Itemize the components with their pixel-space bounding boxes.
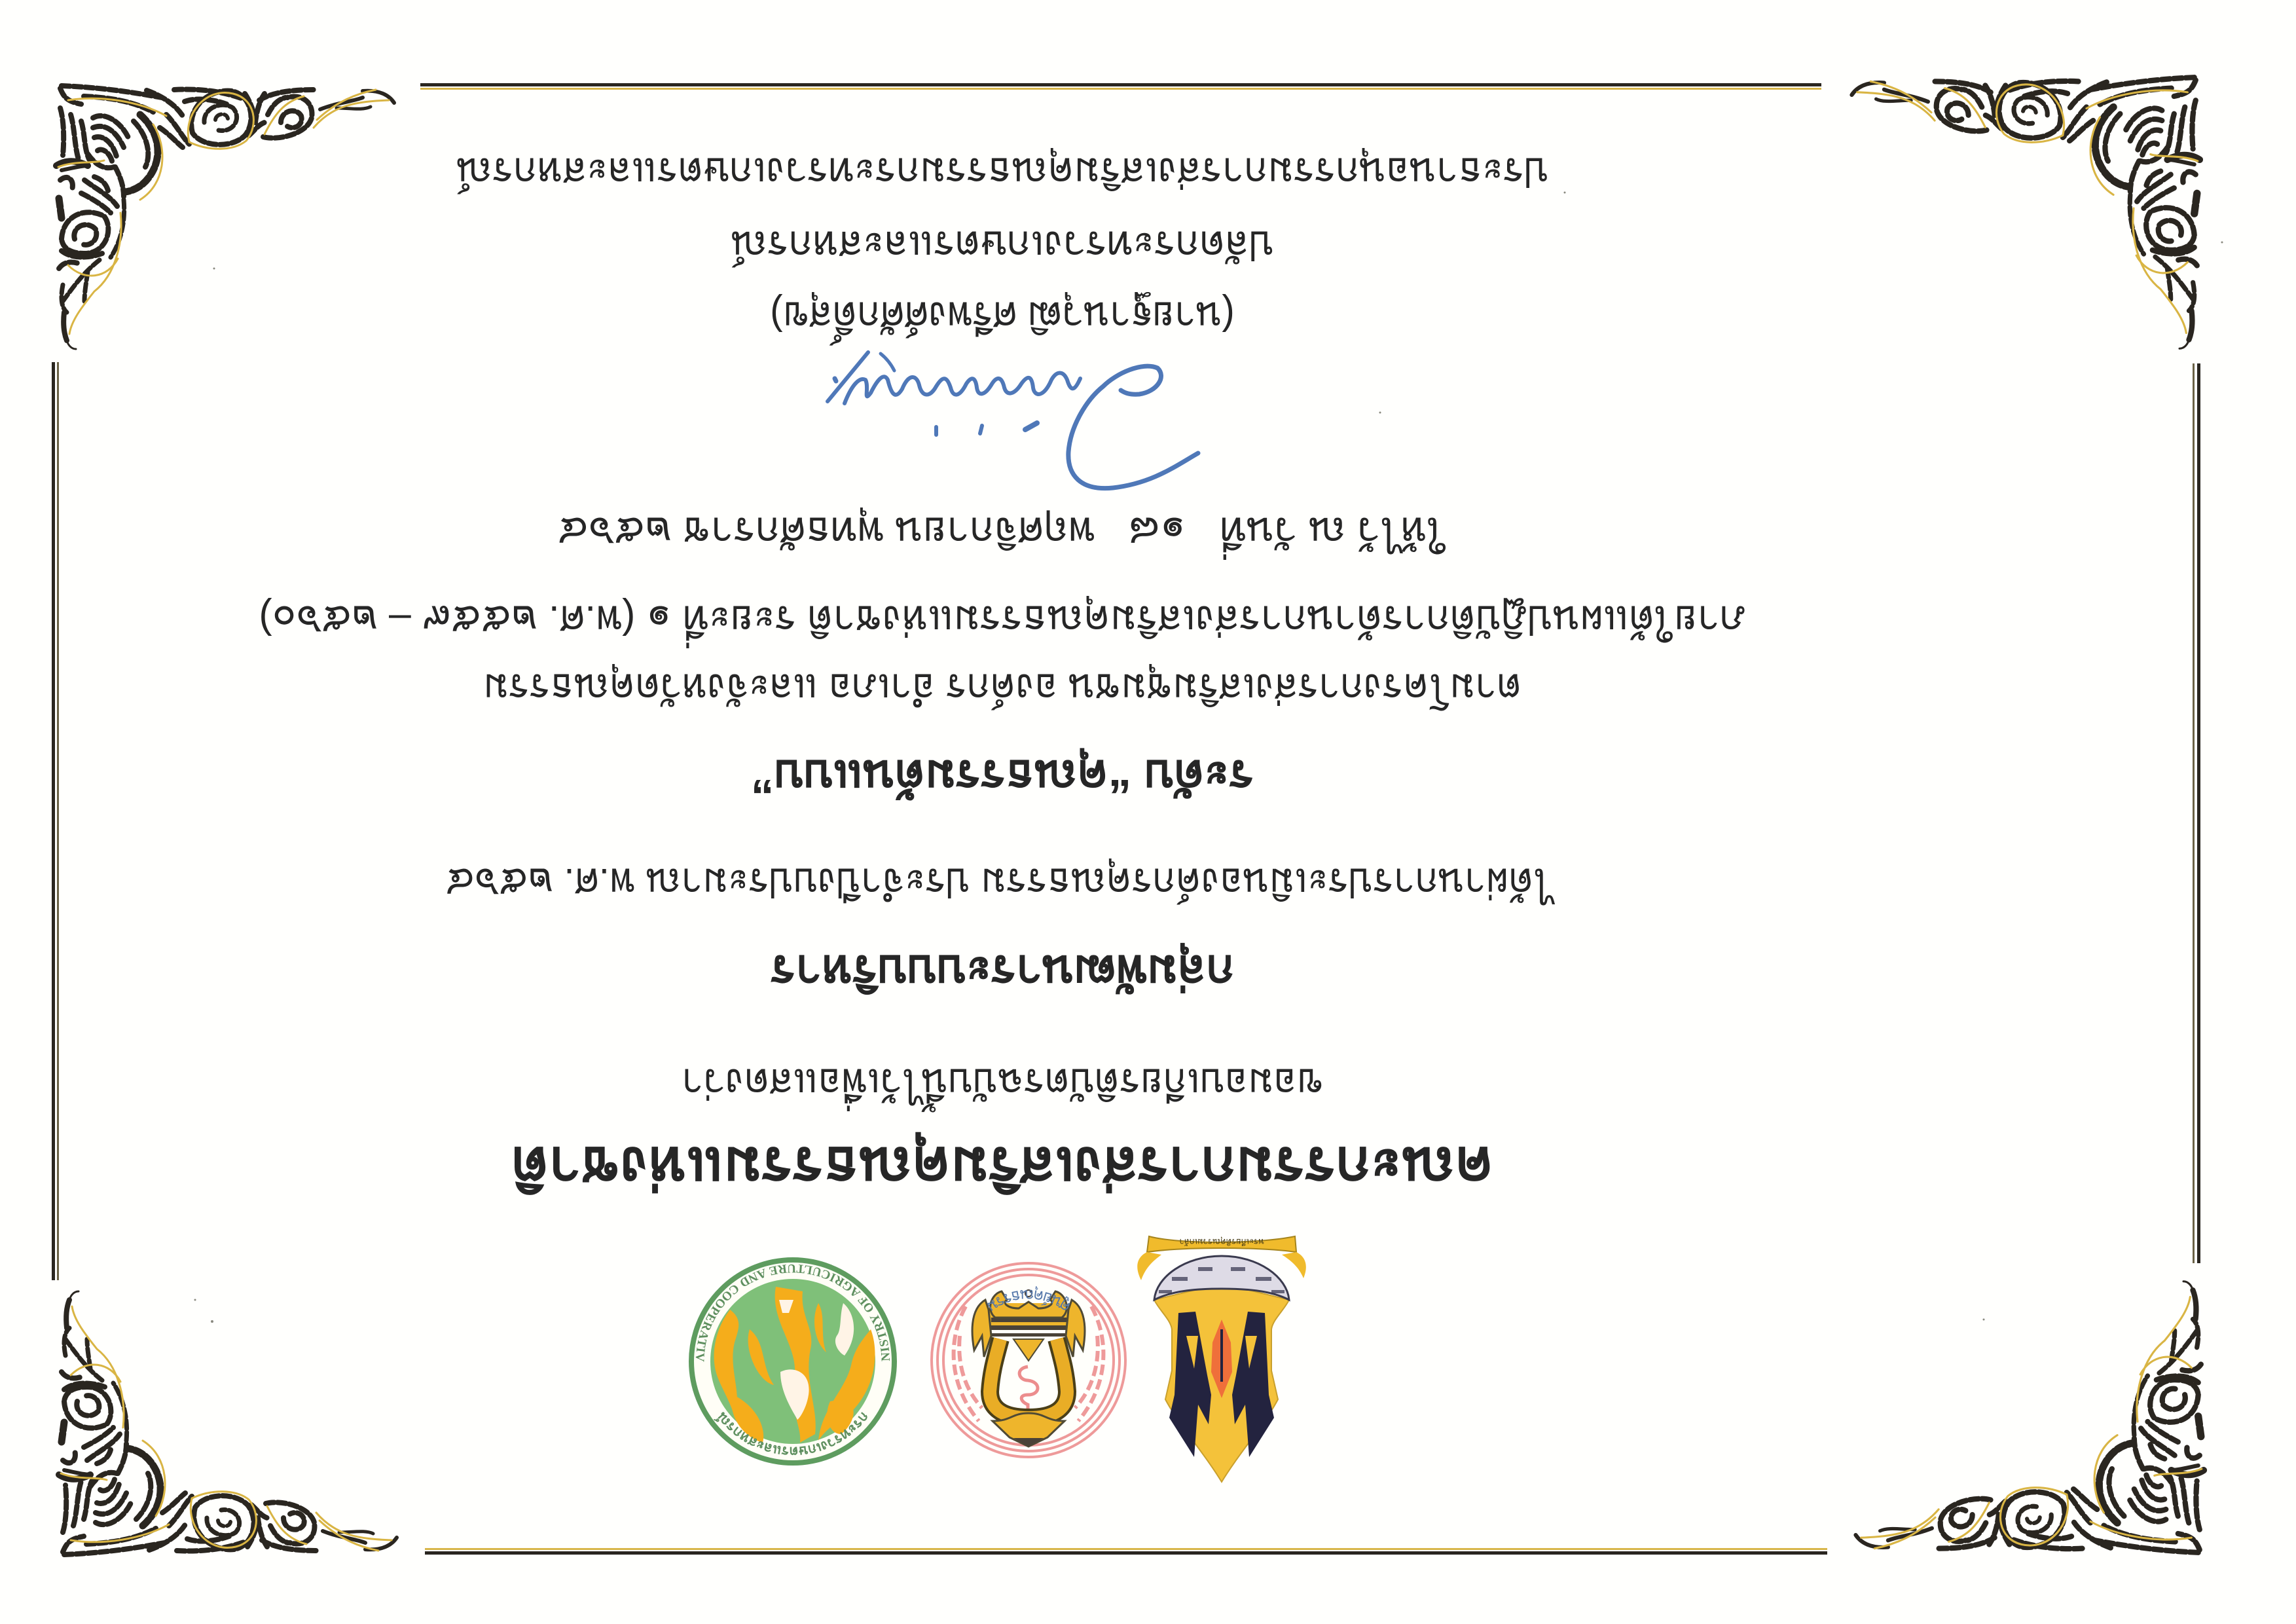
logo: pink moral centre seal [930, 1262, 1127, 1458]
logo: yellow and navy shield [1137, 1235, 1306, 1483]
text: recipient name: กลุ่มพัฒนาระบบบริหาร [771, 946, 1234, 998]
corner ornament: top left [56, 86, 394, 349]
seal ring text: MINISTRY OF AGRICULTURE AND COOPERATIVES [695, 1264, 890, 1362]
corner ornament: bottom left [59, 1291, 397, 1555]
text: certificate presentation line: ขอมอบเกียรติบัตรฉบับนี้ไว้เพื่อแสดงว่า [682, 1060, 1323, 1105]
seal ring Thai text: กระทรวงเกษตรและสหกรณ์ [714, 1412, 867, 1455]
corner ornament: bottom right [1855, 1282, 2204, 1553]
banner text: พระเกียรติคุณรวมเกล้า [1180, 1236, 1264, 1247]
corner ornament: top right [1851, 77, 2200, 348]
title: คณะกรรมการส่งเสริมคุณธรรมแห่งชาติ [511, 1135, 1493, 1200]
text: under national master plan: ภายใต้แผนปฏิบัติการด้านการส่งเสริมคุณธรรมแห่งชาติ ระยะที่ ๑ (พ.ศ. ๒๕๕๙ – ๒๕๖๐) [259, 597, 1746, 642]
text: council president title line: ประธานอนุกรรมการส่งเสริมคุณธรรมกระทรวงเกษตรและสหกรณ์ [456, 149, 1549, 194]
seal ring text: ศูนย์คุณธรรม [987, 1286, 1070, 1311]
text: project line: ตามโครงการส่งเสริมชุมชน องค์กร อำเภอ และจังหวัดคุณธรรม [483, 665, 1522, 710]
text: permanent secretary line: ปลัดกระทรวงเกษตรและสหกรณ์ [731, 223, 1274, 268]
text: assessment statement: ได้ผ่านการประเมินองค์กรคุณธรรม ประจำปีงบประมาณ พ.ศ. ๒๕๖๔ [446, 860, 1552, 905]
scan specks [194, 191, 2223, 1323]
text: signatory name: (นายฐานวุฒิ ศรีพงศ์ศักดิ์สุข) [770, 293, 1235, 339]
text: issue date: ให้ไว้ ณ วันที่ ๑๘ พฤศจิกายน พุทธศักราช ๒๕๖๔ [558, 509, 1447, 554]
text: award level: ระดับ “คุณธรรมต้นแบบ” [751, 750, 1254, 802]
logo: Ministry of Agriculture seal [689, 1257, 897, 1466]
signature [828, 352, 1198, 489]
